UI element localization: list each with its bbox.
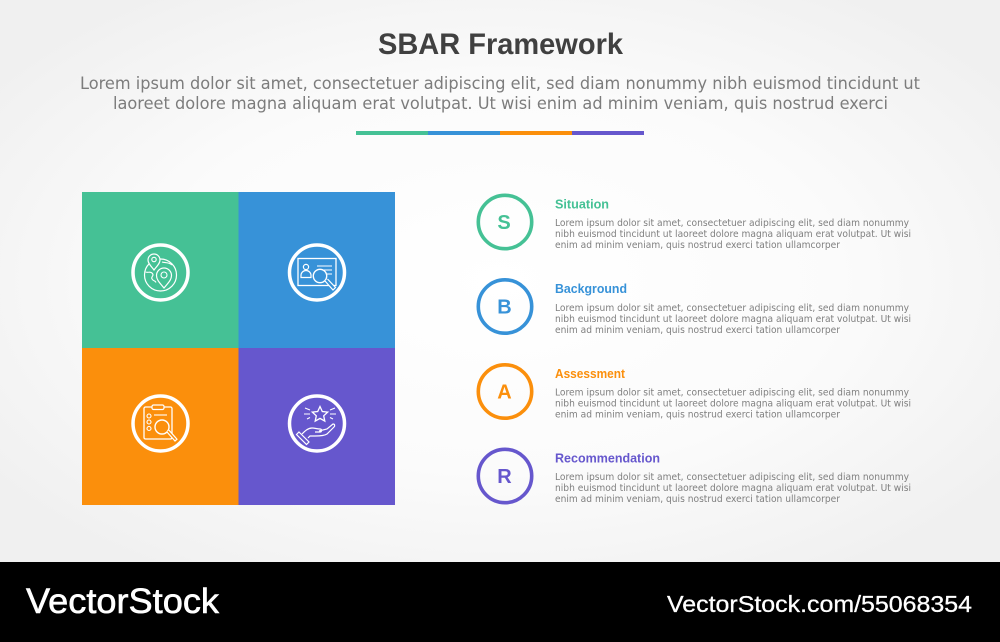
body text: enim ad minim veniam, quis nostrud exerci tation ullamcorper [555, 494, 841, 505]
heading: Recommendation: Recommendation [555, 450, 660, 466]
title: SBAR Framework [378, 28, 623, 61]
icon: globe with location pins [133, 245, 188, 300]
watermark footer bar [0, 562, 1000, 642]
watermark logo text: VectorStock [26, 582, 220, 621]
body text [555, 303, 911, 336]
body text: Lorem ipsum dolor sit amet, consectetuer adipiscing elit, sed diam nonummy [555, 472, 909, 483]
icon: hand holding star [290, 396, 344, 451]
body text: enim ad minim veniam, quis nostrud exerci tation ullamcorper [555, 410, 841, 420]
body text: Lorem ipsum dolor sit amet, consectetuer adipiscing elit, sed diam nonummy [555, 388, 909, 398]
body text: nibh euismod tincidunt ut laoreet dolore magna aliquam erat volutpat. Ut wisi [555, 314, 911, 325]
badge A [478, 365, 532, 418]
body text: nibh euismod tincidunt ut laoreet dolore magna aliquam erat volutpat. Ut wisi [555, 483, 911, 494]
badge R [478, 449, 532, 503]
body text [555, 218, 911, 251]
panel: background tile [238, 192, 395, 348]
body text: Lorem ipsum dolor sit amet, consectetuer adipiscing elit, sed diam nonummy [555, 303, 909, 314]
body text: enim ad minim veniam, quis nostrud exerci tation ullamcorper [555, 240, 841, 251]
title underline [356, 131, 644, 135]
body text [555, 388, 911, 420]
panel: four colour matrix [82, 192, 395, 505]
body text: enim ad minim veniam, quis nostrud exerci tation ullamcorper [555, 325, 841, 336]
badge B [478, 280, 532, 333]
subtitle text: laoreet dolore magna aliquam erat volutpat. Ut wisi enim ad minim veniam, quis nostrud exerci [113, 94, 888, 113]
heading: Situation: Situation [555, 196, 609, 212]
subtitle text: Lorem ipsum dolor sit amet, consectetuer adipiscing elit, sed diam nonummy nibh euismod tincidunt ut [80, 74, 921, 93]
subtitle text [80, 74, 921, 113]
panel: situation tile [82, 192, 238, 348]
badge A: A [497, 382, 512, 404]
list item: recommendation [478, 449, 911, 505]
list item: situation [478, 195, 911, 251]
list item: assessment [478, 365, 911, 420]
list item: background [478, 280, 911, 336]
panel: recommendation tile [238, 348, 395, 505]
icon: ID card with magnifier [290, 245, 344, 300]
body text: nibh euismod tincidunt ut laoreet dolore magna aliquam erat volutpat. Ut wisi [555, 229, 911, 240]
body text [555, 472, 911, 505]
badge S: S [497, 212, 511, 234]
icon: clipboard with magnifier [133, 396, 188, 451]
heading: Assessment: Assessment [555, 366, 626, 381]
body text: Lorem ipsum dolor sit amet, consectetuer adipiscing elit, sed diam nonummy [555, 218, 909, 229]
badge S [478, 195, 532, 249]
badge R: R [497, 466, 512, 488]
badge B: B [497, 296, 512, 318]
watermark url and id: VectorStock.com/55068354 [667, 591, 972, 617]
heading: Background: Background [555, 281, 627, 296]
body text: nibh euismod tincidunt ut laoreet dolore magna aliquam erat volutpat. Ut wisi [555, 398, 911, 410]
panel: assessment tile [82, 348, 238, 505]
